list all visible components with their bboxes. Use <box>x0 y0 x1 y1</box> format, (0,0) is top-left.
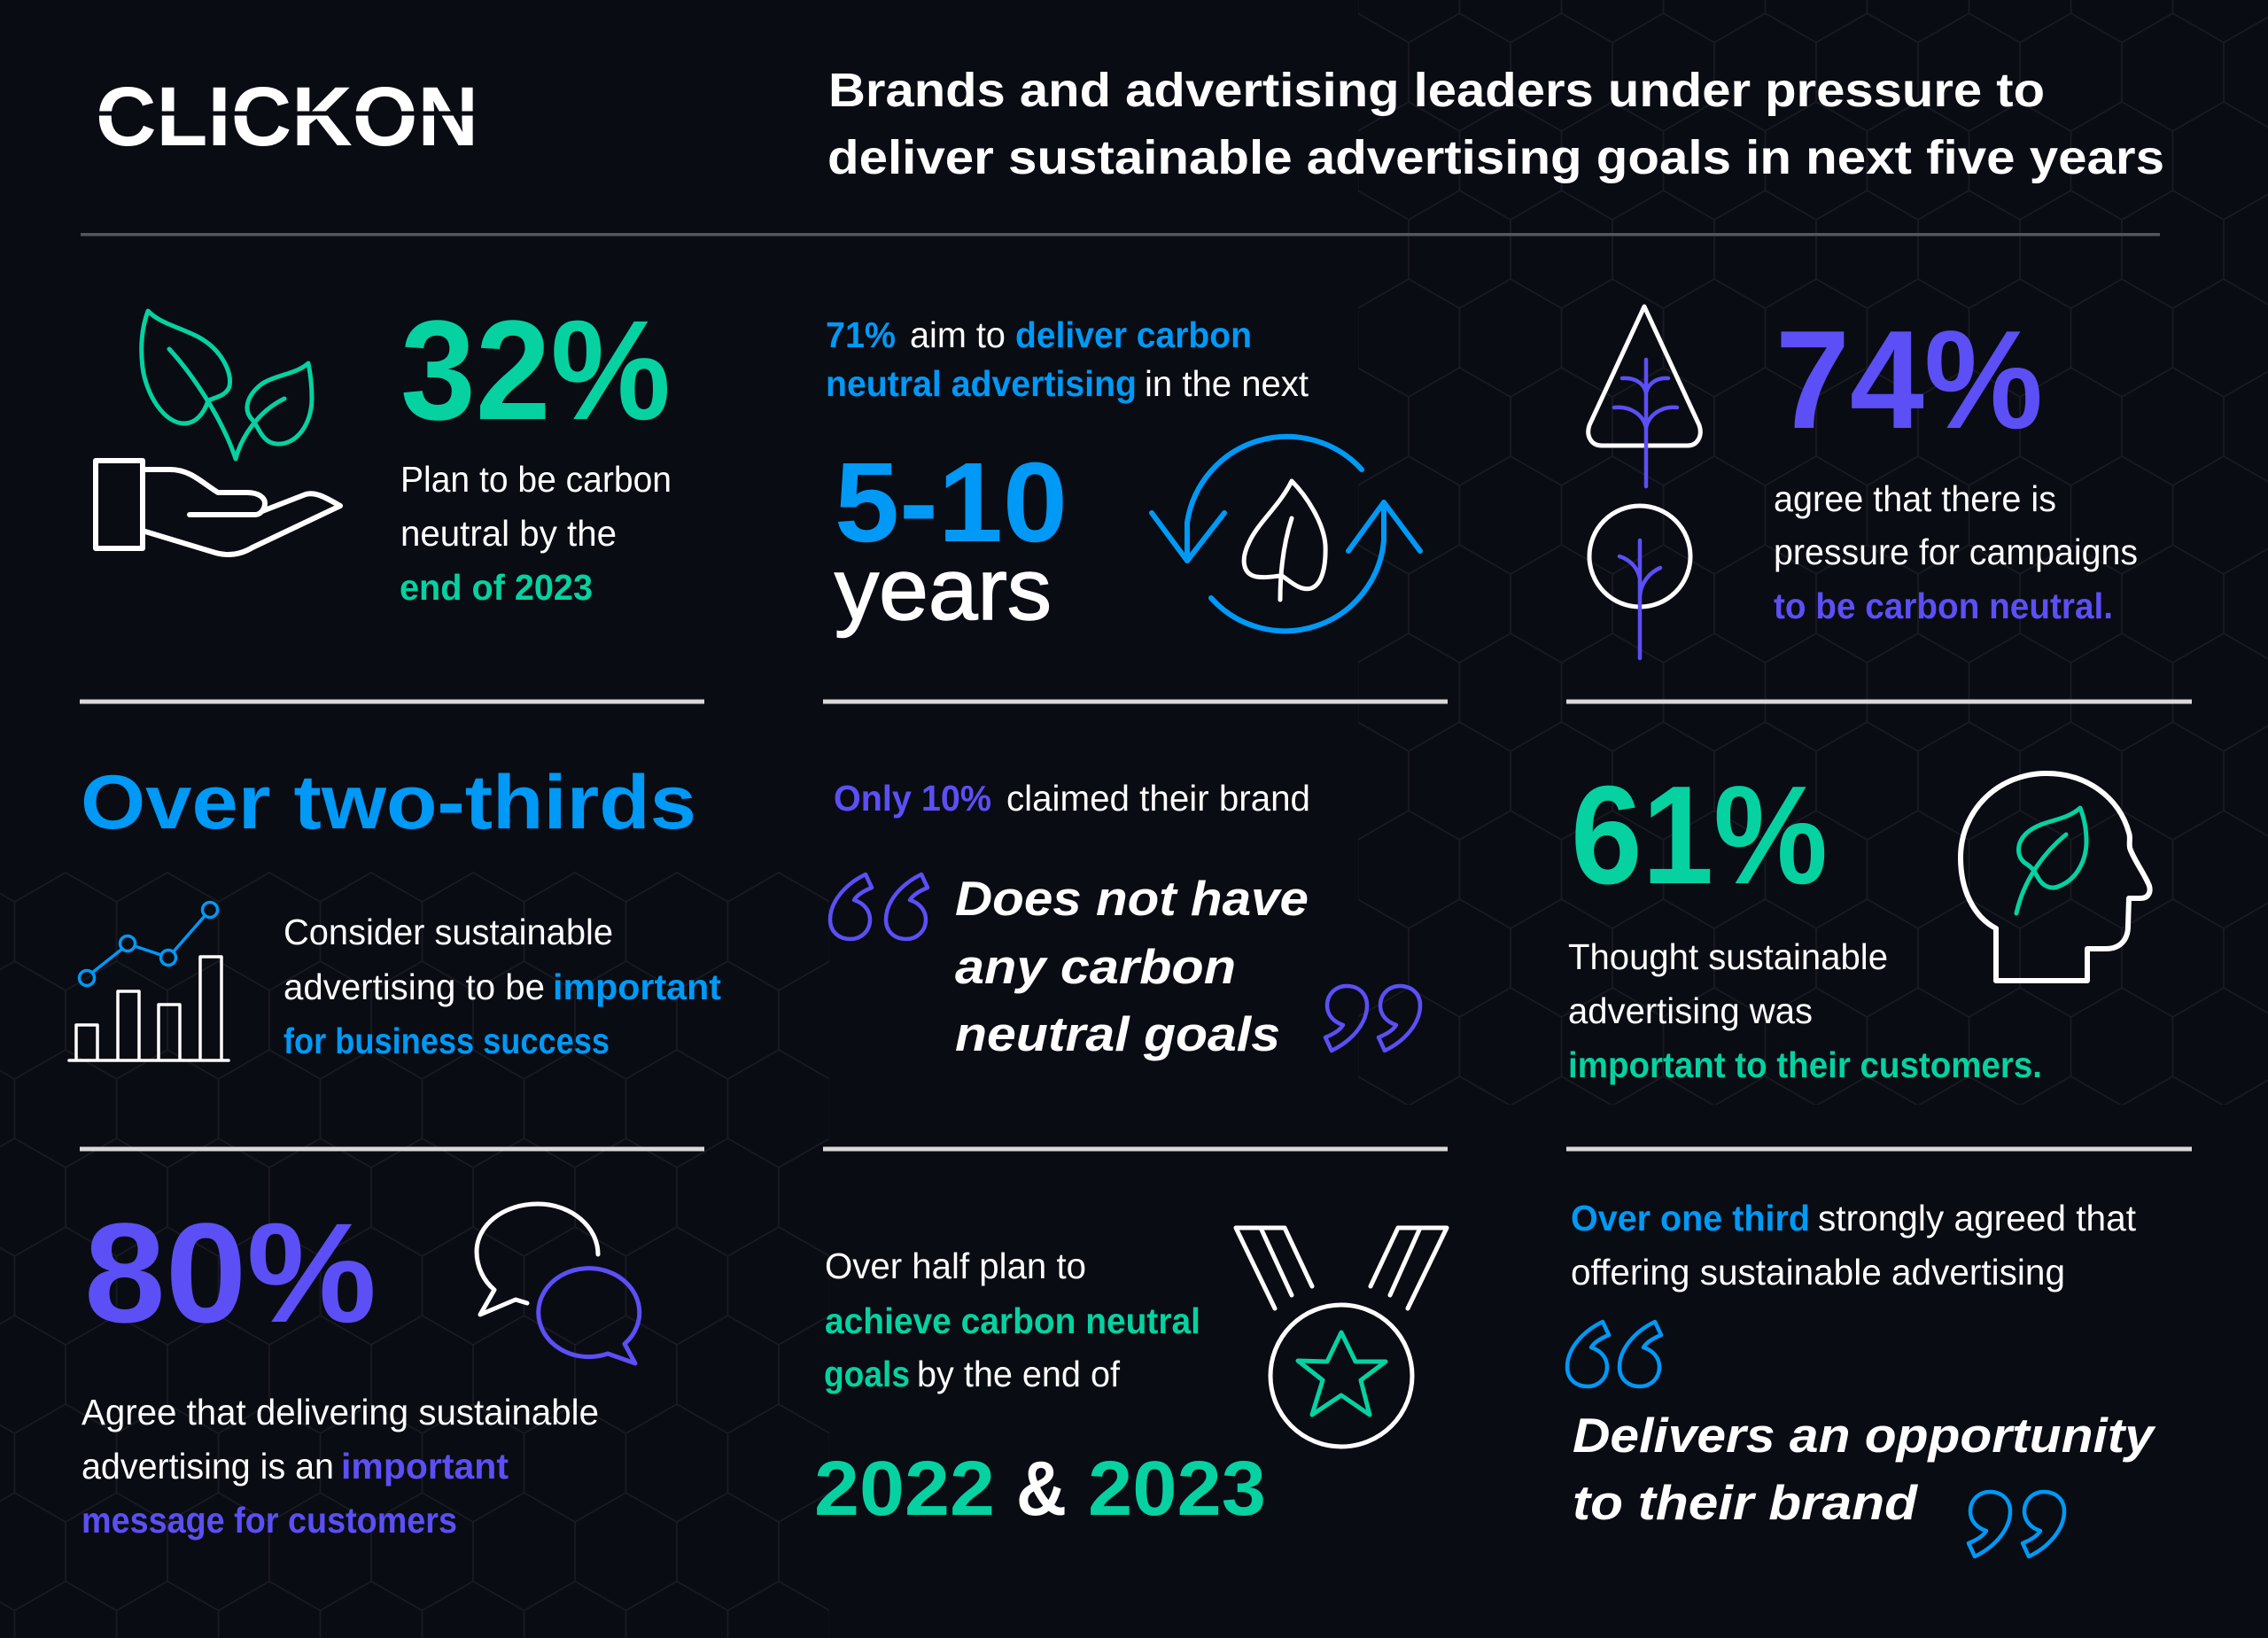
text: only 10% claimed: claimed their brand <box>1006 778 1310 819</box>
text: over one third strongly agreed: strongly agreed that <box>1818 1198 2137 1238</box>
panel: 80% message for customers <box>82 1193 640 1541</box>
icon: closing quote <box>1325 986 1420 1051</box>
panel: over one third <box>1567 1198 2156 1556</box>
quote: delivers an opportunity <box>1573 1408 2156 1530</box>
text: consider sustainable advertising: Consider sustainable <box>284 912 613 952</box>
text: only 10% claimed: Only 10% <box>834 778 991 819</box>
text: 71% aim to deliver: neutral advertising <box>826 363 1137 404</box>
panel: over half 2022 and 2023 <box>814 1228 1447 1532</box>
text: 71% aim to deliver: 71% <box>826 314 896 355</box>
text: over one third strongly agreed <box>1571 1198 2137 1293</box>
icon: speech bubbles <box>477 1204 640 1363</box>
stat: 2022 and 2023: 2022 <box>814 1446 995 1532</box>
title: Brands and advertising leaders under pressure to <box>828 64 2045 117</box>
text: agree that delivering: message for customers <box>82 1500 457 1541</box>
text: plan to be carbon neutral <box>400 459 672 608</box>
quote: does not have any carbon neutral goals <box>955 871 1309 1061</box>
quote: delivers an opportunity: to their brand <box>1573 1475 1919 1530</box>
text: consider sustainable advertising: for business success <box>284 1021 610 1061</box>
stat: 61%: 61% <box>1571 757 1828 913</box>
text: consider sustainable advertising: advertising to be <box>284 966 545 1007</box>
text: 71% aim to deliver: in the next <box>1145 363 1309 404</box>
icon: opening quote <box>1567 1322 1661 1386</box>
stat: 80%: 80% <box>84 1193 377 1352</box>
icon: head with leaf <box>1961 773 2150 981</box>
text: thought sustainable advertising: important to their customers. <box>1568 1044 2042 1085</box>
stat: 5-10 years <box>835 439 1068 638</box>
text: agree that there is pressure <box>1774 478 2138 626</box>
icon: recycling leaf <box>1152 437 1420 631</box>
panel: over two-thirds <box>69 760 721 1061</box>
text: agree that delivering: advertising is an <box>82 1446 334 1487</box>
stat: 5-10 years: 5-10 <box>835 439 1068 566</box>
text: thought sustainable advertising <box>1568 936 2042 1085</box>
icon: growth chart <box>69 902 229 1060</box>
title <box>827 64 2164 184</box>
stat: 2022 and 2023: 2023 <box>1088 1446 1266 1532</box>
stat: 2022 and 2023: & <box>1016 1446 1067 1532</box>
text: agree that delivering <box>82 1392 599 1541</box>
text: 71% aim to deliver: aim to <box>910 314 1006 355</box>
quote: delivers an opportunity: Delivers an opportunity <box>1573 1408 2156 1463</box>
text: agree that there is pressure: agree that there is <box>1774 478 2056 519</box>
icon: closing quote <box>1969 1492 2064 1556</box>
icon: medal with star <box>1236 1228 1447 1447</box>
text: over half plan: goals <box>824 1354 910 1394</box>
text: thought sustainable advertising: advertising was <box>1568 990 1813 1031</box>
text: consider sustainable advertising <box>284 912 721 1061</box>
text: over one third strongly agreed: Over one third <box>1571 1198 1810 1238</box>
stat: 74%: 74% <box>1775 302 2043 458</box>
panel: 74% pressure <box>1588 302 2138 658</box>
quote: does not have any carbon neutral goals: Does not have <box>955 871 1309 926</box>
text: 71% aim to deliver: deliver carbon <box>1015 314 1252 355</box>
title: deliver sustainable advertising goals in next five years <box>827 131 2164 184</box>
quote: does not have any carbon neutral goals: any carbon <box>955 939 1236 994</box>
panel: 71% within 5-10 years <box>826 314 1420 638</box>
text: thought sustainable advertising: Thought sustainable <box>1568 936 1888 977</box>
text: agree that there is pressure: to be carbon neutral. <box>1774 586 2113 626</box>
text: only 10% claimed <box>834 778 1310 819</box>
heading: over two-thirds: Over two-thirds <box>81 760 696 845</box>
icon: trees <box>1588 307 1700 658</box>
stat: 2022 and 2023 <box>814 1446 1266 1532</box>
stat: 5-10 years: years <box>835 540 1052 638</box>
text: over half plan: Over half plan to <box>825 1246 1086 1286</box>
text: agree that there is pressure: pressure for campaigns <box>1774 532 2138 572</box>
text: over half plan: by the end of <box>917 1354 1121 1394</box>
logo: CLICKON: CLICKON <box>96 70 478 164</box>
text: plan to be carbon neutral: end of 2023 <box>400 567 593 608</box>
panel: only 10% <box>830 778 1420 1061</box>
text: agree that delivering: important <box>341 1446 509 1487</box>
text: 71% aim to deliver <box>826 314 1309 404</box>
text: over half plan <box>824 1246 1200 1394</box>
text: over one third strongly agreed: offering sustainable advertising <box>1571 1252 2065 1293</box>
text: over half plan: achieve carbon neutral <box>825 1300 1200 1341</box>
icon: hand holding leaves <box>96 311 340 555</box>
text: agree that delivering: Agree that delivering sustainable <box>82 1392 599 1432</box>
panel: 32% carbon neutral by 2023 <box>96 291 672 608</box>
text: consider sustainable advertising: important <box>553 966 721 1007</box>
icon: opening quote <box>830 874 928 939</box>
panel: 61% customers <box>1568 757 2150 1085</box>
quote: does not have any carbon neutral goals: neutral goals <box>955 1006 1280 1061</box>
text: plan to be carbon neutral: neutral by the <box>400 513 617 554</box>
text: plan to be carbon neutral: Plan to be carbon <box>400 459 672 500</box>
stat: 32%: 32% <box>400 291 671 449</box>
